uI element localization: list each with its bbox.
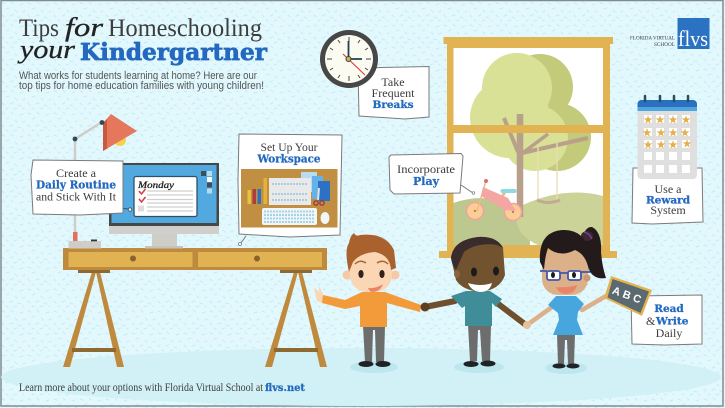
arms bbox=[425, 301, 526, 325]
floor bbox=[1, 348, 721, 406]
clasped hand bbox=[523, 321, 531, 329]
callout: reward system: System bbox=[650, 203, 686, 217]
callout: set up your workspace: Workspace bbox=[257, 152, 320, 166]
reward stars: ★ bbox=[680, 126, 690, 140]
logo: FLVS: flvs bbox=[678, 26, 708, 51]
hills bbox=[454, 193, 603, 246]
reward stars: ★ bbox=[668, 126, 678, 140]
child: boy with orange shirt bbox=[314, 233, 421, 373]
callout: reward system: Reward bbox=[646, 194, 691, 206]
planner window: Monday bbox=[137, 181, 175, 191]
pants and shoes bbox=[464, 325, 496, 367]
reward stars: ★ bbox=[668, 112, 678, 126]
icon: clock bbox=[320, 30, 378, 88]
mouse bbox=[320, 212, 330, 224]
arms bbox=[527, 296, 606, 325]
lamp bbox=[68, 114, 137, 248]
reward stars: ★ bbox=[643, 138, 653, 152]
callout: daily routine: Daily Routine bbox=[36, 178, 116, 192]
chalkboard with ABC bbox=[604, 276, 652, 316]
ponytail bbox=[582, 227, 606, 278]
callout: take frequent breaks: Frequent bbox=[372, 86, 415, 100]
callout: set up your workspace: Set Up Your bbox=[260, 140, 318, 154]
reward stars: ★ bbox=[668, 138, 678, 152]
tree trunk and branches bbox=[504, 114, 588, 217]
pants and shoes bbox=[552, 334, 580, 368]
title: your bbox=[17, 35, 76, 64]
pointing hand bbox=[314, 286, 325, 303]
scissors bbox=[314, 188, 324, 205]
callout: read and write daily: Daily bbox=[656, 326, 682, 340]
callout: take frequent breaks bbox=[358, 66, 429, 119]
logo: FLVS: SCHOOL bbox=[654, 42, 676, 48]
child: boy with teal shirt bbox=[420, 237, 526, 373]
callout: take frequent breaks: Breaks bbox=[372, 99, 414, 111]
logo: FLVS: FLORIDA VIRTUAL bbox=[630, 36, 676, 42]
papers bbox=[269, 172, 330, 205]
callout: daily routine: Create a bbox=[56, 166, 97, 180]
chalkboard with ABC: ABC bbox=[611, 285, 645, 307]
corkboard with supplies bbox=[241, 169, 338, 228]
teal shirt bbox=[451, 291, 502, 326]
child: girl with blue dress bbox=[523, 227, 606, 374]
intro text: top tips for home education families with young children! bbox=[19, 80, 264, 92]
reward stars bbox=[642, 112, 692, 152]
callout: read and write daily: & bbox=[646, 314, 656, 328]
reward stars: ★ bbox=[681, 112, 691, 126]
reward stars: ★ bbox=[656, 126, 666, 140]
head bbox=[451, 237, 505, 292]
crayons and pencil bbox=[248, 178, 267, 204]
callout: daily routine: and Stick With It bbox=[36, 190, 117, 204]
reward stars: ★ bbox=[656, 138, 666, 152]
callout: incorporate play: Play bbox=[413, 175, 440, 188]
title: Tips bbox=[19, 15, 59, 42]
tree crown bbox=[470, 53, 591, 171]
title: Kindergartner bbox=[80, 39, 268, 66]
callout: set up your workspace bbox=[238, 134, 342, 246]
title bbox=[17, 13, 268, 66]
callout: read and write daily bbox=[631, 295, 702, 345]
intro text bbox=[19, 70, 264, 92]
desk bbox=[63, 248, 327, 367]
title: Homeschooling bbox=[108, 15, 262, 42]
reward stars: ★ bbox=[643, 112, 653, 126]
head bbox=[540, 230, 590, 295]
callout: reward system: Use a bbox=[654, 182, 682, 196]
footer text: Learn more about your options with Florida Virtual School at bbox=[19, 380, 264, 394]
keyboard bbox=[262, 208, 317, 225]
pants and shoes bbox=[358, 326, 390, 367]
callout: reward system bbox=[632, 168, 703, 224]
reward stars: ★ bbox=[642, 126, 652, 140]
clasped hand bbox=[420, 302, 430, 312]
swing bbox=[537, 143, 560, 202]
title: for bbox=[65, 13, 104, 42]
callout: take frequent breaks: Take bbox=[381, 75, 405, 89]
blue dress bbox=[548, 296, 584, 335]
footer text: flvs.net bbox=[265, 382, 305, 394]
callout: read and write daily: Read bbox=[654, 303, 684, 315]
callout: incorporate play bbox=[389, 154, 475, 194]
intro text: What works for students learning at home? Here are our bbox=[19, 70, 257, 82]
window frame bars bbox=[439, 37, 617, 258]
illustration: window with tree and bike bbox=[439, 37, 617, 258]
reward stars: ★ bbox=[655, 112, 665, 126]
bike bbox=[466, 179, 522, 220]
logo: FLVS bbox=[630, 18, 710, 51]
callout: read and write daily: Write bbox=[655, 316, 689, 328]
desktop icons bbox=[201, 171, 212, 194]
reward stars: ★ bbox=[682, 136, 692, 150]
head bbox=[342, 233, 400, 292]
callout: incorporate play: Incorporate bbox=[397, 162, 455, 176]
orange shirt bbox=[322, 292, 421, 327]
callout: daily routine bbox=[31, 160, 132, 215]
monitor bbox=[109, 163, 219, 248]
icon: reward calendar bbox=[632, 96, 703, 224]
